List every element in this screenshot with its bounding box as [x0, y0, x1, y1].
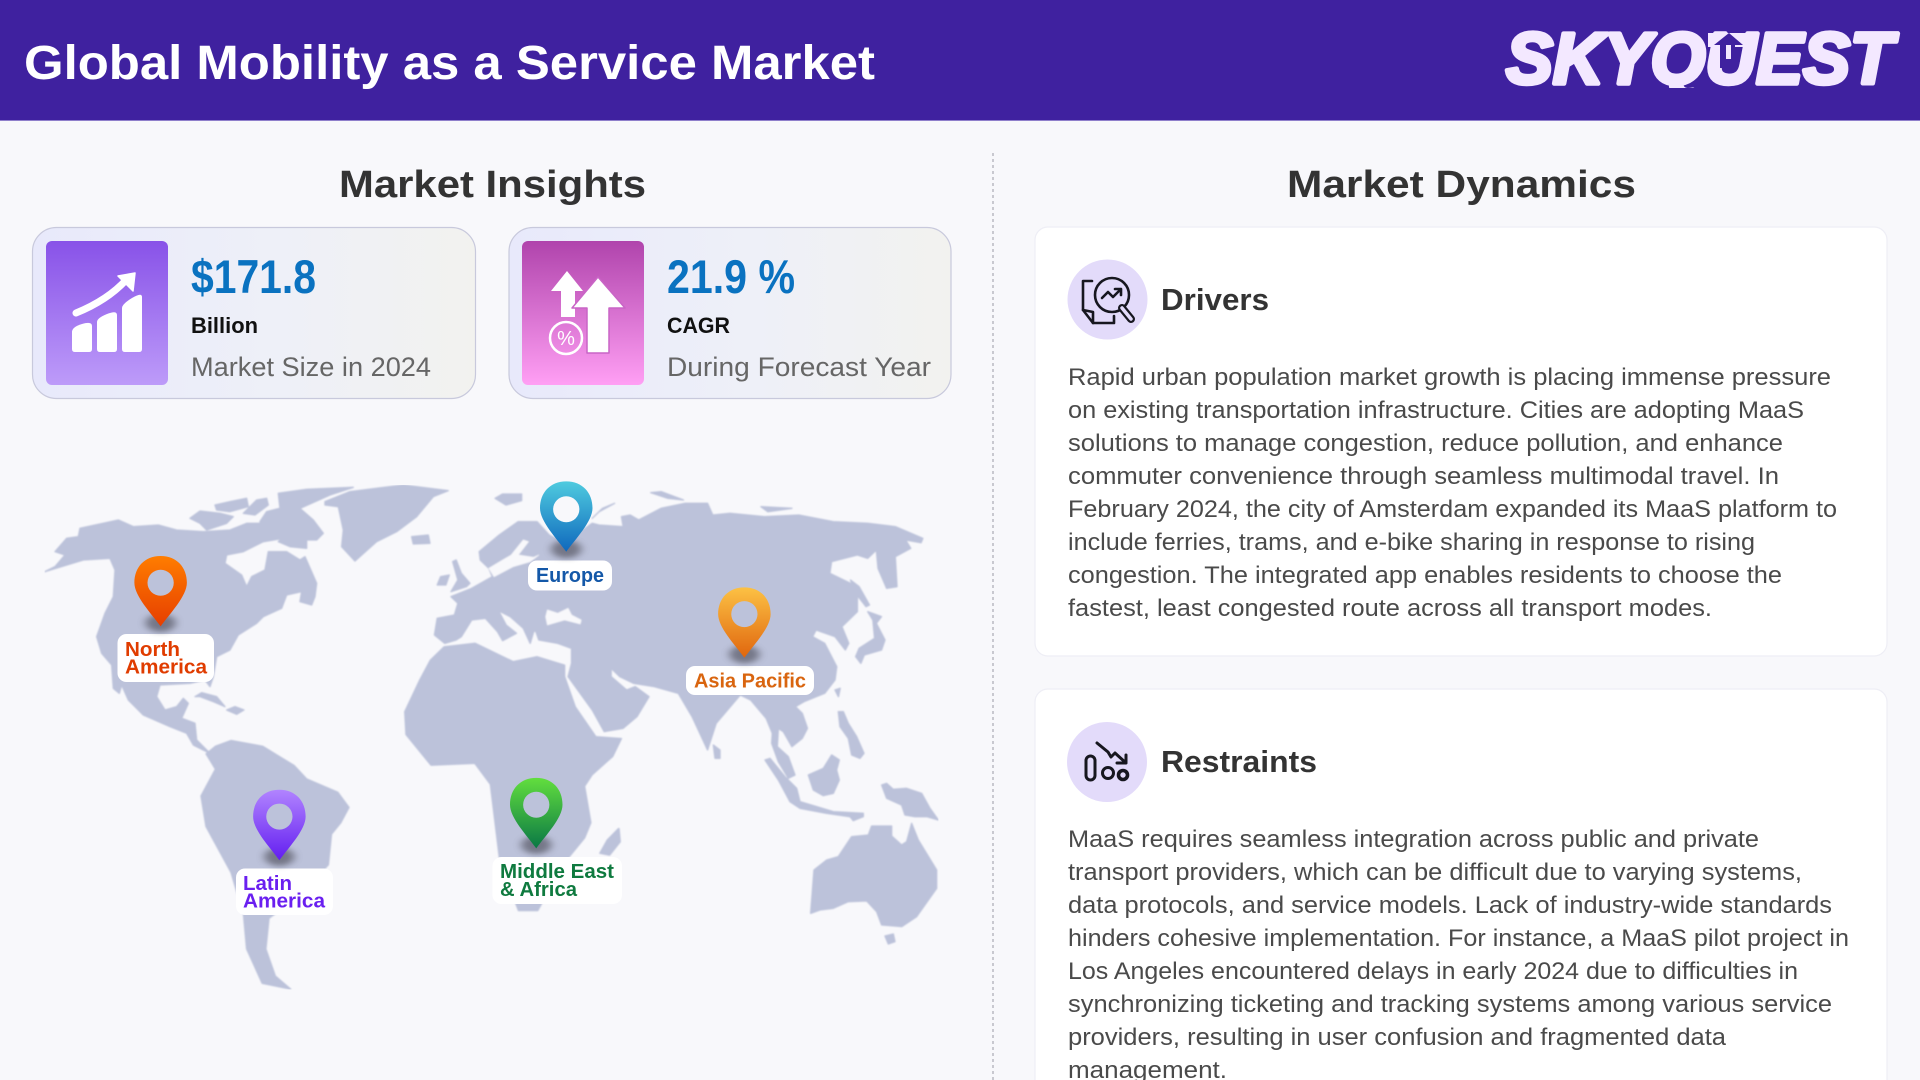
subheading: Drivers: [1161, 282, 1269, 317]
pin: North America: [134, 556, 187, 632]
paragraph: hinders cohesive implementation. For instance, a MaaS pilot project in: [1068, 925, 1849, 952]
label: Latin America: [236, 868, 333, 915]
caption: During Forecast Year: [667, 352, 931, 382]
paragraph: fastest, least congested route across all transport modes.: [1068, 595, 1712, 622]
icon: growth bars: [46, 241, 168, 385]
paragraph: Los Angeles encountered delays in early 2024 due to difficulties in: [1068, 958, 1798, 985]
label: Latin America: Latin: [243, 873, 292, 895]
logo: SkyQuest: SKYQUEST: [1506, 20, 1899, 100]
paragraph: synchronizing ticketing and tracking systems among various service: [1068, 991, 1832, 1018]
Southeast Asia, Australia: [713, 712, 938, 944]
label: Europe: [528, 560, 612, 590]
title: Global Mobility as a Service Market: [24, 37, 875, 90]
pin: Asia Pacific: [718, 587, 771, 663]
pin: Latin America: [253, 790, 306, 866]
paragraph: congestion. The integrated app enables residents to choose the: [1068, 562, 1782, 589]
icon: falling chart: [1067, 722, 1147, 802]
paragraph: [1068, 826, 1849, 1080]
label: Asia Pacific: Asia Pacific: [694, 670, 806, 692]
paragraph: [1068, 364, 1837, 622]
paragraph: solutions to manage congestion, reduce pollution, and enhance: [1068, 430, 1783, 457]
unit: Billion: [191, 313, 258, 338]
South America, Africa, Madagascar: [201, 643, 621, 989]
label: Europe: Europe: [536, 565, 604, 587]
pin: Europe: [540, 481, 592, 558]
icon: up arrows with percent: %: [557, 328, 575, 350]
panel: CAGR card: [509, 228, 951, 398]
value: 21.9 %: [667, 250, 795, 303]
header band: [0, 0, 1920, 121]
label: Latin America: America: [243, 890, 326, 912]
paragraph: Rapid urban population market growth is placing immense pressure: [1068, 364, 1831, 391]
icon: report magnifier: [1068, 260, 1148, 340]
caption: Market Size in 2024: [191, 352, 431, 382]
paragraph: include ferries, trams, and e-bike sharing in response to rising: [1068, 529, 1755, 556]
value: $171.8: [191, 250, 316, 303]
paragraph: commuter convenience through seamless multimodal travel. In: [1068, 463, 1779, 490]
Eurasia with islands: [434, 492, 923, 750]
heading: Market Dynamics: Market Dynamics: [1287, 164, 1636, 206]
paragraph: February 2024, the city of Amsterdam expanded its MaaS platform to: [1068, 496, 1837, 523]
panel: restraints: [1035, 689, 1887, 1080]
unit: CAGR: [667, 313, 730, 338]
label: Asia Pacific: [686, 666, 814, 695]
heading: Market Insights: Market Insights: [339, 164, 646, 206]
label: Middle East and Africa: Middle East: [500, 861, 614, 883]
label: North America: [118, 634, 214, 682]
panel: drivers: [1035, 227, 1887, 656]
subheading: Restraints: [1161, 744, 1317, 779]
label: North America: America: [125, 656, 208, 678]
panel: market size card: [32, 228, 476, 398]
paragraph: on existing transportation infrastructure. Cities are adopting MaaS: [1068, 397, 1804, 424]
icon: up arrows with percent: [522, 241, 644, 385]
label: Middle East and Africa: & Africa: [500, 879, 578, 901]
paragraph: providers, resulting in user confusion and fragmented data: [1068, 1024, 1727, 1051]
paragraph: MaaS requires seamless integration across public and private: [1068, 826, 1759, 853]
Americas north: continent, arctic islands, Greenland, Caribbean: [45, 485, 448, 753]
label: North America: North: [125, 639, 180, 661]
pin: Middle East and Africa: [510, 778, 562, 854]
label: Middle East and Africa: [492, 857, 622, 904]
paragraph: transport providers, which can be difficult due to varying systems,: [1068, 859, 1802, 886]
paragraph: data protocols, and service models. Lack of industry-wide standards: [1068, 892, 1832, 919]
world map: [45, 485, 938, 989]
